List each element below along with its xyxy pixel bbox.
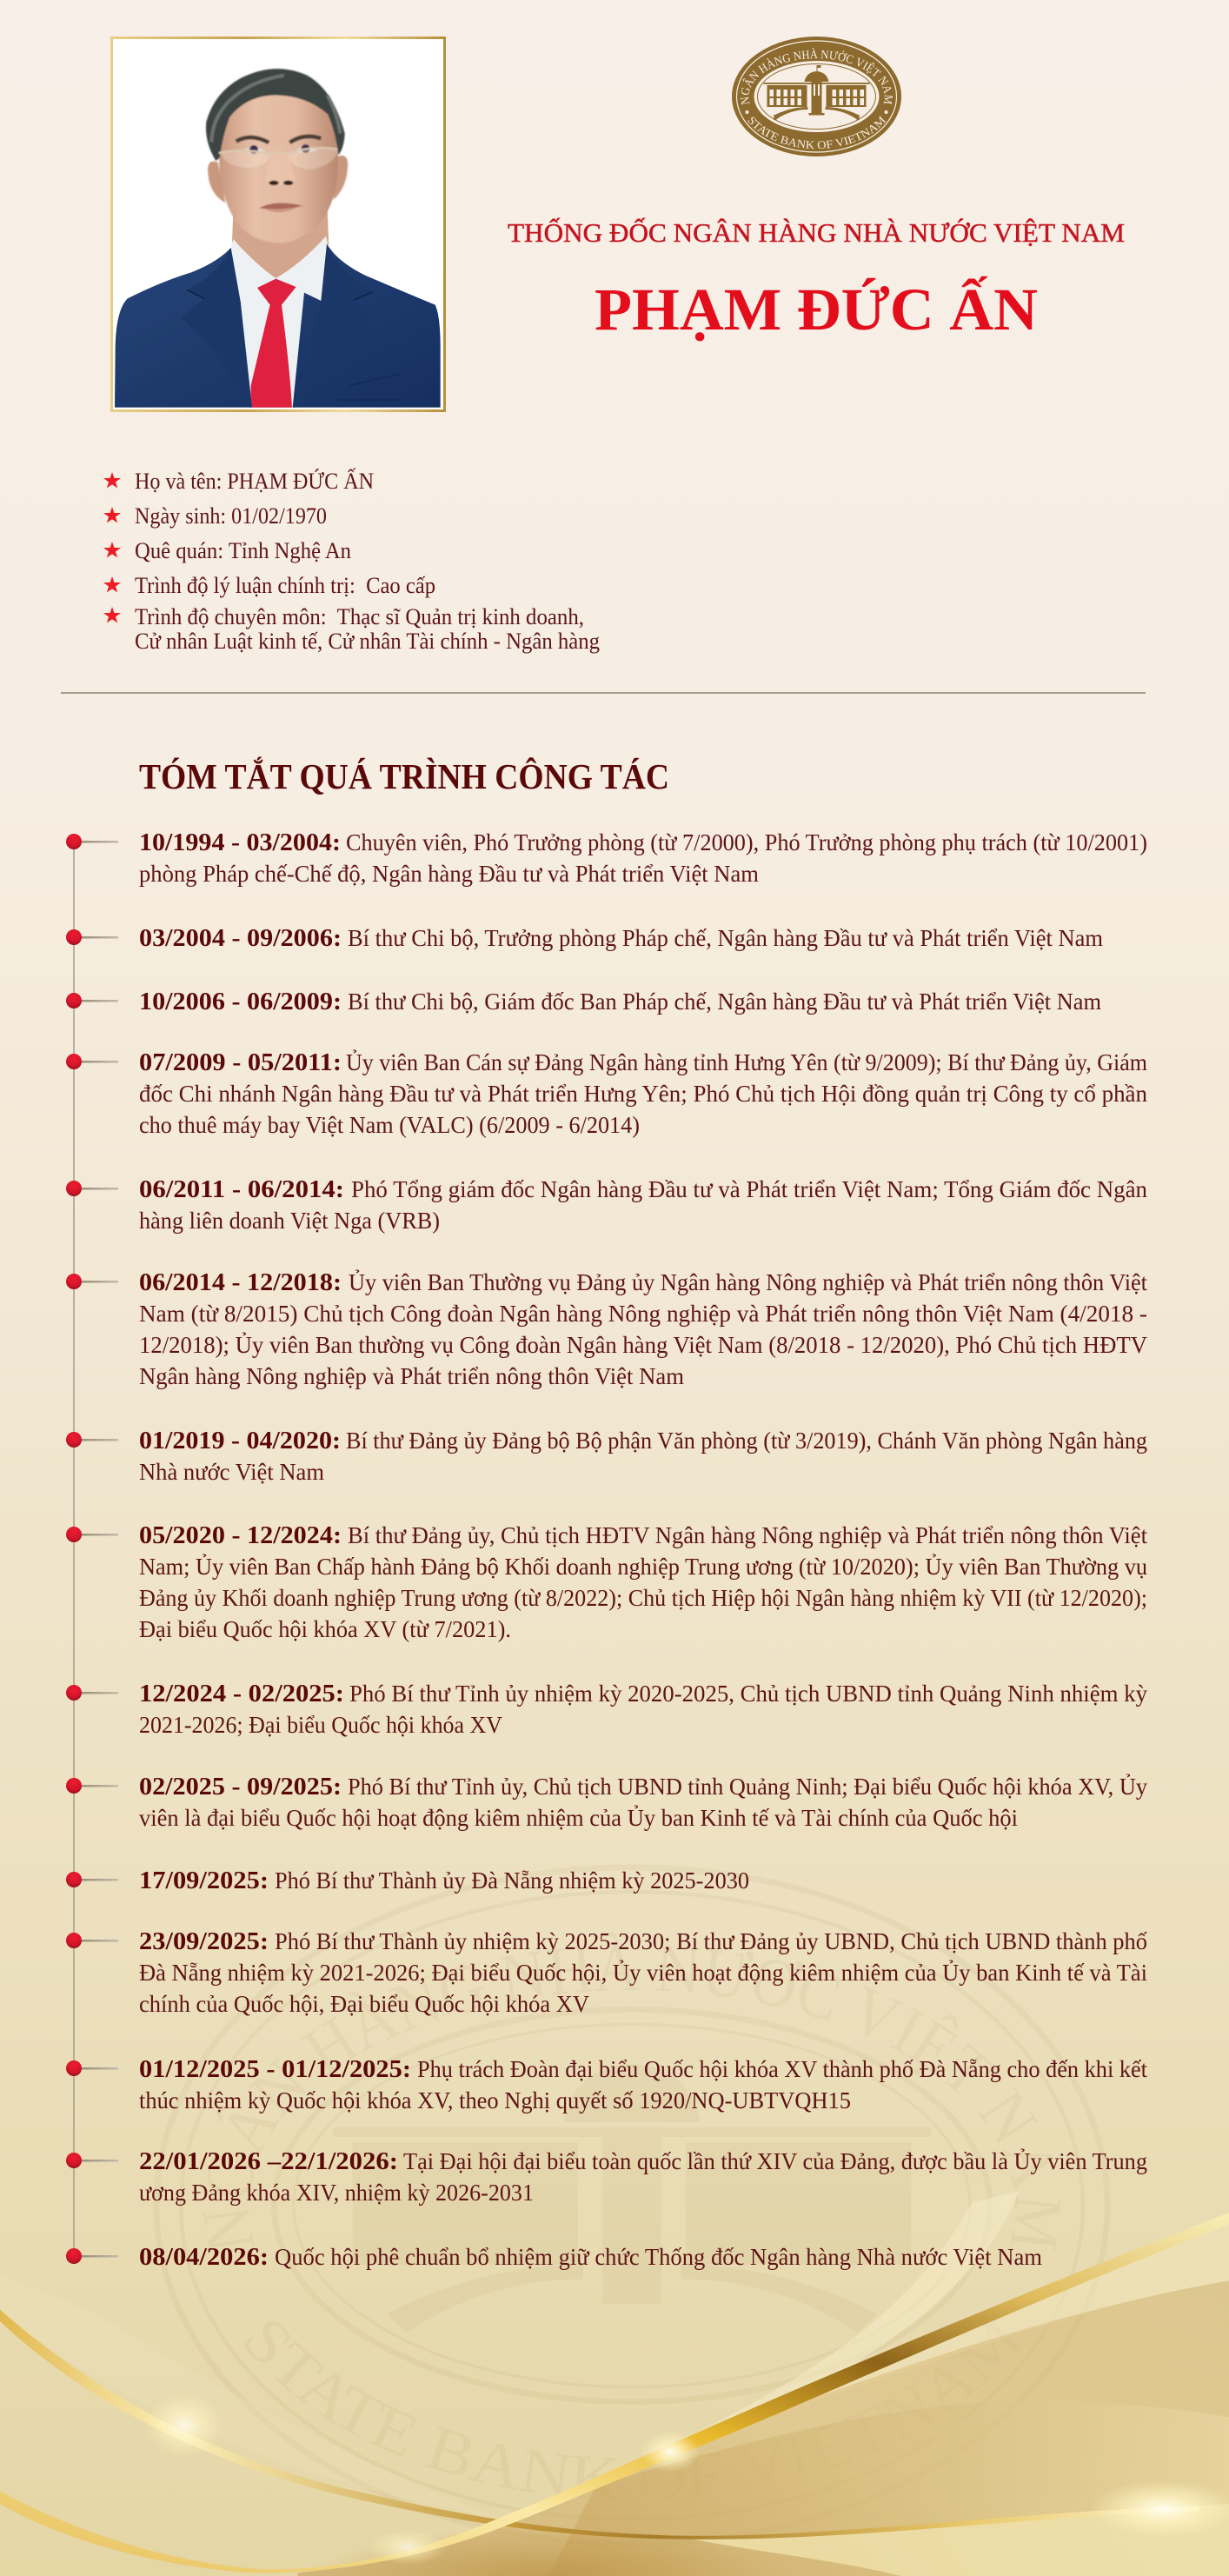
- entry 05/2020: [66, 1521, 1147, 1642]
- info: qualifications: Trình độ chuyên môn: Thạc sĩ Quản trị kinh doanh,: [135, 604, 584, 629]
- entry 06/2011: 06/2011 - 06/2014:: [139, 1176, 344, 1203]
- portrait frame: [111, 38, 445, 410]
- seal building windows: [770, 84, 864, 105]
- entry 10/2006: Bí thư Chi bộ, Giám đốc Ban Pháp chế, Ngân hàng Đầu tư và Phát triển Việt Nam: [348, 988, 1101, 1015]
- entry 05/2020: Đại biểu Quốc hội khóa XV (từ 7/2021).: [139, 1615, 511, 1642]
- entry 01/12/2025: thúc nhiệm kỳ Quốc hội khóa XV, theo Nghị quyết số 1920/NQ-UBTVQH15: [139, 2087, 851, 2113]
- entry 01/2019: Nhà nước Việt Nam: [139, 1458, 324, 1485]
- pale sweep left: [0, 2275, 502, 2519]
- entry 12/2024: 2021-2026; Đại biểu Quốc hội khóa XV: [139, 1711, 502, 1738]
- watermark: state bank seal: NGÂN HÀNG NHÀ NƯỚC VIỆT NAM: [203, 1932, 1060, 2253]
- heading: name: PHẠM ĐỨC ẤN: [595, 275, 1038, 343]
- entry 07/2009: Ủy viên Ban Cán sự Đảng Ngân hàng tỉnh Hưng Yên (từ 9/2009); Bí thư Đảng ủy, Giám: [346, 1048, 1147, 1075]
- pocket: [336, 374, 400, 400]
- entry 02/2025: viên là đại biểu Quốc hội hoạt động kiêm nhiệm của Ủy ban Kinh tế và Tài chính của Quốc hội: [139, 1804, 1018, 1831]
- entry 07/2009: [66, 1048, 1147, 1138]
- entry 05/2020: Bí thư Đảng ủy, Chủ tịch HĐTV Ngân hàng Nông nghiệp và Phát triển nông thôn Việt: [348, 1521, 1147, 1548]
- entry 06/2011: hàng liên doanh Việt Nga (VRB): [139, 1207, 440, 1234]
- suit: [115, 243, 441, 408]
- entry 23/09/2025: chính của Quốc hội, Đại biểu Quốc hội khóa XV: [139, 1990, 589, 2017]
- watermark: state bank seal: [154, 1864, 1111, 2413]
- info: political level: Trình độ lý luận chính trị: Cao cấp: [135, 573, 435, 598]
- hair: [206, 69, 345, 161]
- seal dots: [746, 110, 888, 114]
- entry 06/2014: 06/2014 - 12/2018:: [139, 1269, 342, 1296]
- eye right: [294, 146, 317, 153]
- watermark: state bank seal: STATE BANK OF VIETNAM: [244, 2321, 404, 2413]
- nostrils: [269, 181, 279, 185]
- entry 12/2024: Phó Bí thư Tỉnh ủy nhiệm kỳ 2020-2025, Chủ tịch UBND tỉnh Quảng Ninh nhiệm kỳ: [349, 1680, 1147, 1707]
- bottom warm shade: [314, 2526, 784, 2576]
- face: [219, 91, 338, 243]
- entry 10/1994: [66, 829, 1147, 887]
- entry 07/2009: đốc Chi nhánh Ngân hàng Đầu tư và Phát triển Hưng Yên; Phó Chủ tịch Hội đồng quản trị Công ty cổ phần: [139, 1080, 1147, 1107]
- tie: [250, 279, 296, 408]
- right light band: [674, 2214, 1229, 2443]
- entry 23/09/2025: 23/09/2025:: [139, 1928, 269, 1955]
- entry 02/2025: 02/2025 - 09/2025:: [139, 1774, 342, 1801]
- jacket lapels: [181, 243, 375, 408]
- entry 23/09/2025: Đà Nẵng nhiệm kỳ 2021-2026; Đại biểu Quốc hội, Ủy viên hoạt động kiêm nhiệm của Ủy ban Kinh tế và Tài: [139, 1959, 1147, 1986]
- entry 22/01/2026: Tại Đại hội đại biểu toàn quốc lần thứ XIV của Đảng, được bầu là Ủy viên Trung: [403, 2147, 1147, 2174]
- seal text bottom: STATE BANK OF VIETNAM: [747, 116, 887, 150]
- ribbon A: [0, 2310, 1199, 2539]
- hair highlight: [211, 76, 341, 142]
- entry 22/01/2026: 22/01/2026 –22/1/2026:: [139, 2148, 398, 2175]
- entry 05/2020: 05/2020 - 12/2024:: [139, 1522, 342, 1549]
- mouth: [259, 203, 302, 210]
- state bank logo: [732, 37, 901, 156]
- entry 17/09/2025: Phó Bí thư Thành ủy Đà Nẵng nhiệm kỳ 2025-2030: [275, 1867, 749, 1894]
- entry 06/2014: Nam (từ 8/2015) Chủ tịch Công đoàn Ngân hàng Nông nghiệp và Phát triển nông thôn Việt Nam (4/2018 -: [139, 1300, 1147, 1327]
- entry 17/09/2025: [66, 1867, 749, 1894]
- heading: position: THỐNG ĐỐC NGÂN HÀNG NHÀ NƯỚC VIỆT NAM: [508, 216, 1125, 248]
- entry 01/2019: Bí thư Đảng ủy Đảng bộ Bộ phận Văn phòng (từ 3/2019), Chánh Văn phòng Ngân hàng: [346, 1427, 1147, 1454]
- info: hometown: Quê quán: Tỉnh Nghệ An: [135, 538, 351, 563]
- entry 10/1994: phòng Pháp chế-Chế độ, Ngân hàng Đầu tư và Phát triển Việt Nam: [139, 860, 759, 887]
- seal building: [763, 65, 869, 120]
- entry 06/2014: 12/2018); Ủy viên Ban thường vụ Công đoàn Ngân hàng Việt Nam (8/2018 - 12/2020), Phó Chủ tịch HĐTV: [139, 1331, 1147, 1358]
- sparkle: lower: [369, 2530, 447, 2565]
- entry 23/09/2025: Phó Bí thư Thành ủy nhiệm kỳ 2025-2030; Bí thư Đảng ủy UBND, Chủ tịch UBND thành phố: [275, 1927, 1147, 1954]
- glasses: [219, 148, 337, 154]
- entry 02/2025: Phó Bí thư Tỉnh ủy, Chủ tịch UBND tỉnh Quảng Ninh; Đại biểu Quốc hội khóa XV, Ủy: [348, 1773, 1147, 1800]
- pupils: [249, 145, 258, 154]
- entry 03/2004: [66, 924, 1103, 952]
- ribbon B: [0, 2213, 1229, 2573]
- entry 03/2004: 03/2004 - 09/2006:: [139, 925, 342, 952]
- entry 06/2011: Phó Tổng giám đốc Ngân hàng Đầu tư và Phát triển Việt Nam; Tổng Giám đốc Ngân: [351, 1175, 1147, 1202]
- entry 01/12/2025: 01/12/2025 - 01/12/2025:: [139, 2056, 411, 2083]
- timeline: [66, 829, 1147, 2271]
- entry 22/01/2026: ương Đảng khóa XIV, nhiệm kỳ 2026-2031: [139, 2179, 534, 2206]
- section heading: TÓM TẮT QUÁ TRÌNH CÔNG TÁC: [139, 756, 669, 796]
- bright lower right sweep: [690, 2504, 1229, 2576]
- entry 08/04/2026: 08/04/2026:: [139, 2244, 269, 2271]
- head: [206, 69, 348, 243]
- nose: [265, 154, 296, 185]
- entry 10/2006: [66, 988, 1101, 1015]
- info: birth date: Ngày sinh: 01/02/1970: [135, 503, 327, 529]
- entry 01/2019: [66, 1427, 1147, 1485]
- entry 06/2014: Ngân hàng Nông nghiệp và Phát triển nông thôn Việt Nam: [139, 1362, 684, 1389]
- personal info list: [103, 469, 600, 654]
- entry 07/2009: cho thuê máy bay Việt Nam (VALC) (6/2009 - 6/2014): [139, 1111, 640, 1138]
- entry 17/09/2025: 17/09/2025:: [139, 1867, 269, 1894]
- portrait photo: [115, 69, 441, 408]
- entry 10/1994: Chuyên viên, Phó Trưởng phòng (từ 7/2000), Phó Trưởng phòng phụ trách (từ 10/2001): [346, 829, 1147, 855]
- entry 01/12/2025: [66, 2055, 1147, 2113]
- entry 03/2004: Bí thư Chi bộ, Trưởng phòng Pháp chế, Ngân hàng Đầu tư và Phát triển Việt Nam: [348, 924, 1103, 951]
- seal text top: NGÂN HÀNG NHÀ NƯỚC VIỆT NAM: [741, 48, 894, 105]
- shirt: [231, 236, 329, 408]
- sparkle: right end: [1090, 2480, 1229, 2538]
- entry 10/1994: 10/1994 - 03/2004:: [139, 829, 341, 856]
- entry 02/2025: [66, 1773, 1147, 1831]
- timeline axis: [73, 842, 75, 2256]
- entry 01/2019: 01/2019 - 04/2020:: [139, 1428, 341, 1454]
- eyebrows: [236, 136, 321, 143]
- sparkle: left curve: [145, 2393, 223, 2458]
- ears: [208, 156, 348, 203]
- entry 07/2009: 07/2009 - 05/2011:: [139, 1049, 342, 1076]
- neck: [232, 209, 329, 281]
- entry 06/2014: [66, 1268, 1147, 1389]
- decorative golden waves: [0, 2191, 1229, 2576]
- entry 12/2024: [66, 1680, 1147, 1738]
- lapel notches: [187, 290, 372, 300]
- entry 05/2020: Đảng ủy Khối doanh nghiệp Trung ương (từ 8/2022); Chủ tịch Hiệp hội Ngân hàng nhiệm kỳ VII (từ 12/2020);: [139, 1584, 1147, 1611]
- entry 12/2024: 12/2024 - 02/2025:: [139, 1681, 344, 1707]
- eye left: [242, 147, 265, 153]
- entry 23/09/2025: [66, 1927, 1147, 2017]
- seal ring: [732, 37, 901, 156]
- info: qualifications: [103, 604, 600, 654]
- lens tint: [219, 148, 337, 170]
- entry 10/2006: 10/2006 - 06/2009:: [139, 988, 342, 1015]
- entry 22/01/2026: [66, 2147, 1147, 2206]
- entry 05/2020: Nam; Ủy viên Ban Chấp hành Đảng bộ Khối doanh nghiệp Trung ương (từ 10/2020); Ủy viên Ban Thường vụ: [139, 1553, 1147, 1580]
- sparkle: centre: [641, 2432, 700, 2472]
- pale light band: [674, 2191, 1019, 2443]
- entry 06/2011: [66, 1175, 1147, 1234]
- info: qualifications: Cử nhân Luật kinh tế, Cử nhân Tài chính - Ngân hàng: [135, 629, 600, 654]
- entry 01/12/2025: Phụ trách Đoàn đại biểu Quốc hội khóa XV thành phố Đà Nẵng cho đến khi kết: [417, 2055, 1147, 2082]
- info: full name: Họ và tên: PHẠM ĐỨC ẤN: [135, 469, 374, 494]
- lower gold wave: [548, 2400, 1229, 2576]
- entry 06/2014: Ủy viên Ban Thường vụ Đảng ủy Ngân hàng Nông nghiệp và Phát triển nông thôn Việt: [349, 1268, 1147, 1295]
- upper gold area: [298, 2280, 1229, 2576]
- entry 08/04/2026: Quốc hội phê chuẩn bổ nhiệm giữ chức Thống đốc Ngân hàng Nhà nước Việt Nam: [275, 2243, 1042, 2270]
